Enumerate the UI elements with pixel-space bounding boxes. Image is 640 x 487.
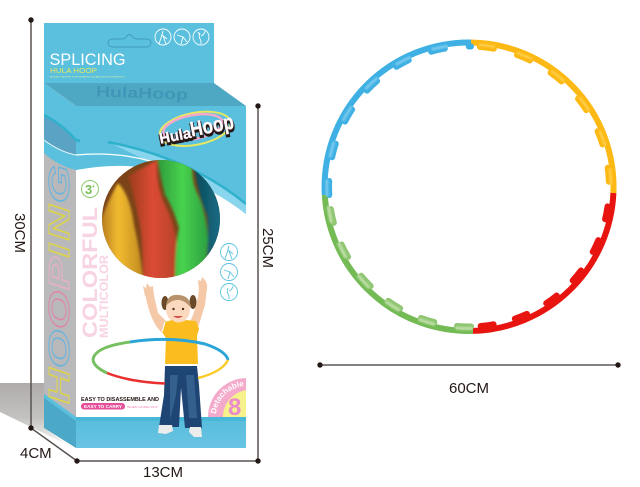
floor band (76, 421, 246, 448)
detachable badge: 8 (228, 394, 241, 421)
box top face (44, 83, 246, 106)
Hula Hoop logo: Hula (158, 127, 194, 150)
Hula Hoop logo: Hoop (188, 111, 236, 142)
side wordmark: O (42, 291, 75, 329)
side wordmark: I (42, 243, 75, 258)
box hanger card (44, 23, 214, 84)
product claim text: WHEN GOING OUT (127, 405, 158, 409)
child (143, 277, 207, 437)
detachable badge: Detachable (210, 381, 244, 414)
label: 60CM: 60CM (449, 380, 489, 397)
label: 4CM: 4CM (20, 445, 52, 462)
pigtails (162, 296, 168, 310)
Hula Hoop logo (158, 110, 235, 147)
side wordmark: P (42, 256, 75, 290)
card fine print: ADDED WEIGHT FOR MOMENTUM AND A FUN WORKOUT (50, 76, 126, 78)
floor shadow (0, 383, 70, 446)
side wordmark: N (42, 204, 75, 241)
arms (146, 295, 166, 333)
age badge: 3 (85, 182, 92, 197)
box front face (76, 106, 246, 448)
blue header swoosh (76, 106, 246, 214)
card subtitle: HULA HOOP (50, 66, 97, 75)
product claim text: EASY TO DISASSEMBLE AND (81, 397, 159, 403)
blue segment (325, 42, 471, 195)
side wordmark: H (42, 367, 75, 404)
age badge (82, 180, 98, 198)
side wordmark (48, 166, 70, 404)
shirt (162, 320, 199, 364)
hanger hole (108, 34, 151, 47)
dimension line hoop (317, 362, 621, 368)
label: 13CM: 13CM (143, 464, 183, 481)
ghost logo: HulaHoop (96, 83, 188, 104)
activity icons top (155, 29, 209, 45)
jeans (159, 366, 202, 428)
age badge: + (92, 184, 95, 190)
product photo of hoops (102, 160, 220, 278)
card title: SPLICING (50, 51, 126, 69)
label: 30CM: 30CM (11, 213, 28, 253)
head (166, 295, 190, 323)
green segment (325, 195, 473, 331)
side wordmark: O (42, 330, 75, 368)
Hula Hoop logo: Hula (158, 125, 193, 148)
vertical headline: COLORFUL (79, 207, 102, 338)
red segment (473, 193, 613, 331)
package box (44, 23, 326, 448)
side wordmark: G (42, 165, 75, 203)
box side face (42, 83, 76, 448)
vertical subheadline: MULTICOLOR (99, 254, 111, 338)
hands (143, 283, 154, 296)
product claim text: EASY TO CARRY (84, 404, 123, 410)
label: 25CM: 25CM (259, 228, 276, 268)
product claim text (81, 397, 159, 410)
activity icons side (220, 244, 238, 300)
hula hoop around child (93, 339, 228, 384)
shoes (158, 425, 173, 434)
hoop product (325, 42, 614, 331)
yellow segment (471, 42, 614, 193)
dimension lines left box (28, 17, 261, 464)
Hula Hoop logo: Hoop (189, 113, 236, 143)
